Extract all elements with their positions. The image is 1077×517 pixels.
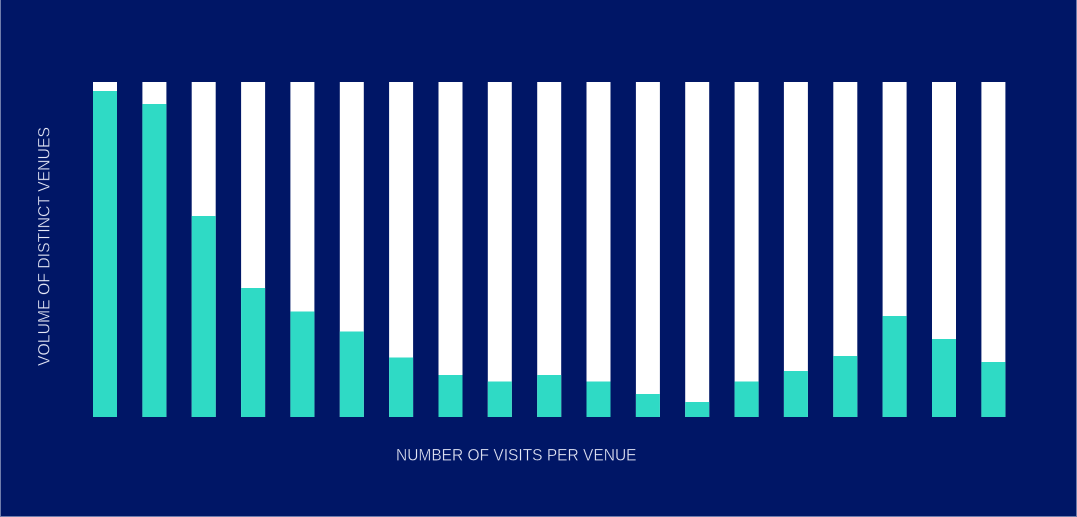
y-axis label: VOLUME OF DISTINCT VENUES (34, 127, 54, 366)
bar 12 (636, 82, 660, 417)
bar 19 (981, 82, 1005, 417)
bar 13 (685, 82, 709, 417)
bar 4 (241, 82, 265, 417)
bar 14 (735, 82, 759, 417)
x-axis label: NUMBER OF VISITS PER VENUE (396, 446, 636, 464)
bar 18 (932, 82, 956, 417)
bar 8 (438, 82, 462, 417)
bar 11 (586, 82, 610, 417)
bar 5 (290, 82, 314, 417)
bar 2 (142, 82, 166, 417)
bar 16 (833, 82, 857, 417)
bar 15 (784, 82, 808, 417)
bar chart (93, 82, 1005, 417)
bar 10 (537, 82, 561, 417)
bar 1 (93, 82, 117, 417)
bar 3 (192, 82, 216, 417)
bar 6 (340, 82, 364, 417)
bar 17 (883, 82, 907, 417)
bar 9 (488, 82, 512, 417)
bar 7 (389, 82, 413, 417)
